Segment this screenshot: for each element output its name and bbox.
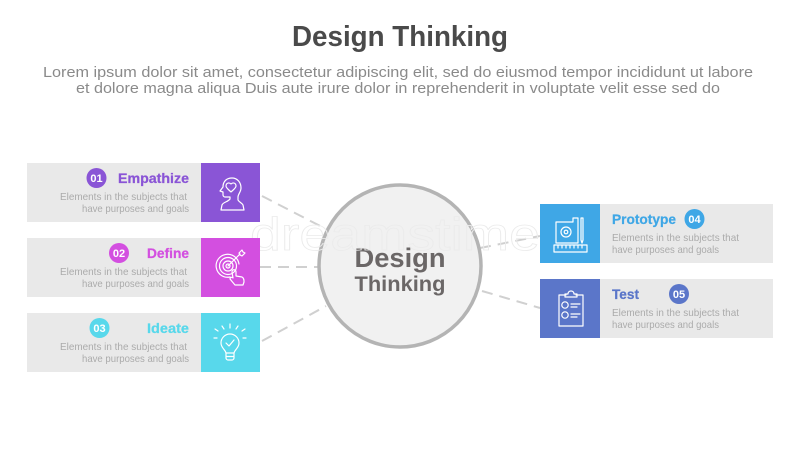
subtitle: et dolore magna aliqua Duis aute irure dolor in reprehenderit in voluptate velit esse sed do (76, 80, 720, 97)
card: Ideate: Elements in the subjects that (60, 341, 187, 353)
card: Prototype: Elements in the subjects that (612, 232, 739, 244)
card: Prototype: have purposes and goals (612, 244, 719, 256)
card: Define (27, 238, 260, 297)
icon: target with hand (216, 250, 245, 285)
card: Test: Test (612, 286, 639, 302)
icon: head with heart (220, 178, 244, 210)
central circle: Design (354, 243, 446, 273)
icon: light bulb with check (214, 324, 246, 360)
card: Test: Elements in the subjects that (612, 307, 739, 319)
card: Empathize: 01 (90, 173, 103, 185)
card: Test (540, 279, 773, 338)
watermark: dreamstime (250, 208, 540, 260)
card: Define: Define (147, 245, 189, 261)
card: Empathize: have purposes and goals (82, 203, 189, 215)
card: Ideate (27, 313, 260, 372)
card: Empathize (27, 163, 260, 222)
card: Empathize: Elements in the subjects that (60, 191, 187, 203)
card: Empathize: Empathize (118, 170, 189, 186)
icon: blueprint and ruler (554, 218, 587, 252)
card: Prototype (540, 204, 773, 263)
title: Design Thinking (292, 21, 508, 53)
card: Test: 05 (673, 289, 685, 301)
card: Ideate: have purposes and goals (82, 353, 189, 365)
card: Prototype: 04 (688, 214, 701, 226)
card: Test: have purposes and goals (612, 319, 719, 331)
card: Define: 02 (113, 248, 125, 260)
card: Ideate: Ideate (147, 320, 189, 336)
card: Define: have purposes and goals (82, 278, 189, 290)
central circle (319, 185, 481, 347)
central circle: Thinking (354, 273, 446, 296)
card: Define: Elements in the subjects that (60, 266, 187, 278)
card: Ideate: 03 (93, 323, 106, 335)
dashed connectors (260, 196, 540, 341)
icon: clipboard checklist (559, 291, 583, 326)
subtitle: Lorem ipsum dolor sit amet, consectetur adipiscing elit, sed do eiusmod tempor incididunt ut labore (43, 64, 753, 81)
card: Prototype: Prototype (612, 211, 676, 227)
subtitle (43, 64, 753, 97)
